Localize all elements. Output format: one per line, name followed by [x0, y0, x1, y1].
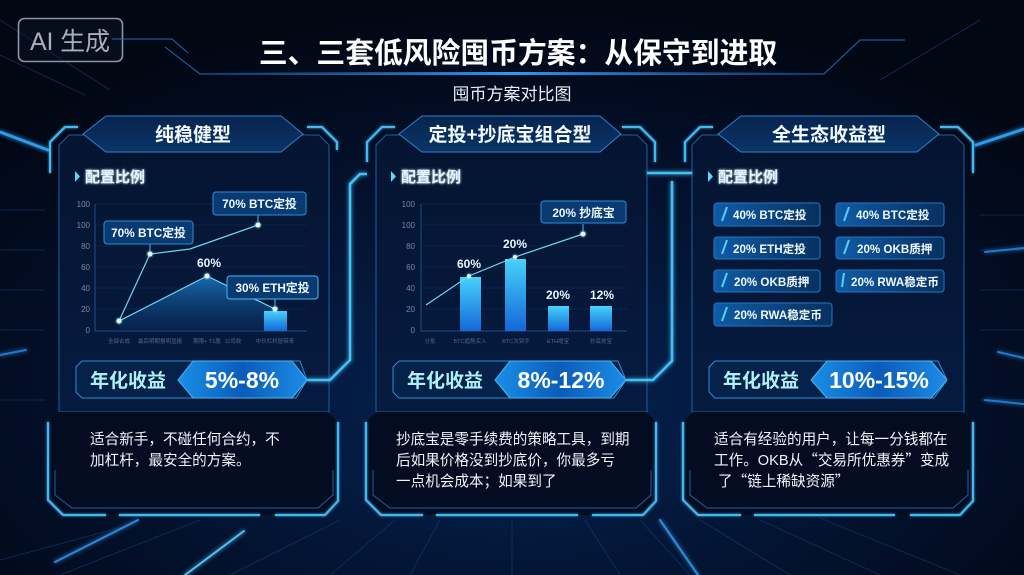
- panel three header: [718, 116, 939, 152]
- chart: allocation line and area: 最后明期报明显报: [138, 337, 182, 345]
- description box two: 后如果价格没到抄底价，你最多亏: [396, 452, 615, 469]
- chart: allocation bars: BTC趋势买入: [453, 337, 487, 345]
- chart: allocation bars: 20: [406, 305, 416, 314]
- description box one: [48, 412, 338, 515]
- description box three: 适合有经验的用户，让每一分钱都在: [714, 431, 948, 448]
- chart: allocation bars: [402, 200, 627, 345]
- chart: allocation bars: 20%: [503, 237, 527, 251]
- AI badge: [18, 18, 122, 62]
- callout: 30% ETH: 30% ETH定投: [235, 281, 310, 295]
- yield bar: 10%-15%: 年化收益: [723, 369, 799, 392]
- panel two header: 定投+抄底宝组合型: [428, 123, 592, 146]
- panel three frame: [685, 127, 973, 412]
- description box two: 抄底宝是零手续费的策略工具，到期: [396, 431, 630, 448]
- tag: 20% RWA left: [714, 303, 832, 326]
- tag: 40% BTC left: 40% BTC定投: [733, 208, 807, 222]
- panel: 全生态收益型: [683, 116, 973, 515]
- callout: 30% ETH: [227, 276, 318, 299]
- chart: allocation bars: 12%: [590, 288, 614, 302]
- connector: panel one to panel two: [307, 174, 367, 380]
- chart: allocation line and area: 100: [77, 221, 91, 230]
- yield bar: 10%-15%: [709, 361, 947, 398]
- chart: allocation line and area: 80: [81, 242, 91, 251]
- tag: 20% RWA left: 20% RWA稳定币: [734, 308, 822, 322]
- AI badge: AI 生成: [30, 28, 110, 56]
- tag: 40% BTC left: [714, 203, 820, 226]
- yield bar: 8%-12%: 8%-12%: [518, 367, 604, 393]
- yield bar: 5%-8%: 5%-8%: [205, 367, 279, 393]
- tag: 20% ETH: 20% ETH定投: [733, 242, 806, 256]
- title glow rule: [200, 72, 824, 75]
- callout: 20% 抄底宝: [541, 201, 626, 223]
- tag: 20% OKB left: [714, 270, 820, 292]
- panel one header: [83, 116, 303, 152]
- description box two: [366, 412, 656, 515]
- yield bar: 5%-8%: [76, 361, 307, 398]
- panel one section heading: 配置比例: [85, 169, 145, 186]
- panel: 定投+抄底宝组合型: [366, 116, 656, 515]
- panel one frame: [50, 127, 337, 412]
- connector: panel two to panel three: [626, 173, 692, 380]
- chart: allocation line and area: 60: [81, 263, 91, 272]
- header ornament lines: [112, 39, 905, 74]
- chart: allocation bars: BTC次到手: [502, 337, 530, 345]
- panel three header: 全生态收益型: [772, 123, 886, 146]
- chart: allocation bars: 40: [406, 284, 416, 293]
- panel: 纯稳健型: [48, 116, 338, 515]
- panel two frame: [367, 127, 655, 412]
- chart: allocation bars: 100: [402, 221, 416, 230]
- tag: 20% OKB right: [836, 237, 944, 259]
- chart: allocation line and area: 期限+ T1股: [193, 337, 221, 345]
- description box two: 一点机会成本；如果到了: [396, 473, 557, 490]
- chart: allocation bars: 抄底技宝: [590, 337, 612, 345]
- chart: allocation line and area: 中长杠杆层带来: [256, 337, 295, 345]
- callout: 70% BTC right: [213, 192, 306, 215]
- callout: 70% BTC left: 70% BTC定投: [111, 226, 186, 240]
- panel one header: 纯稳健型: [155, 123, 231, 146]
- chart: allocation bars: 0: [411, 326, 416, 335]
- callout: 70% BTC right: 70% BTC定投: [222, 197, 297, 211]
- yield bar: 5%-8%: 年化收益: [90, 369, 166, 392]
- description box three: [683, 412, 973, 515]
- chart: allocation line and area: 40: [81, 284, 91, 293]
- chart: allocation bars: 20%: [546, 288, 570, 302]
- chart: allocation line and area: 60%: [197, 256, 221, 270]
- chart: allocation bars: ETH增宝: [547, 337, 569, 345]
- tag: 20% OKB right: 20% OKB质押: [857, 242, 932, 256]
- chart: allocation bars: 60: [406, 263, 416, 272]
- allocation tags: [714, 203, 944, 326]
- description box three: 工作。OKB从“交易所优惠券”变成: [714, 449, 949, 470]
- yield bar: 8%-12%: [393, 361, 626, 398]
- yield bar: 8%-12%: 年化收益: [407, 369, 483, 392]
- panel three section heading: 配置比例: [718, 169, 778, 186]
- title: 三、三套低风险囤币方案：从保守到进取: [259, 38, 777, 70]
- subtitle: 囤币方案对比图: [452, 85, 572, 104]
- chart: allocation bars: 100: [402, 200, 416, 209]
- chart: allocation bars: 80: [406, 242, 416, 251]
- tag: 20% ETH: [714, 237, 820, 259]
- chart: allocation bars: 60%: [457, 257, 481, 271]
- chart: allocation line and area: 0: [86, 326, 91, 335]
- tag: 40% BTC right: 40% BTC定投: [856, 208, 930, 222]
- description box three: 了“链上稀缺资源”: [718, 470, 849, 491]
- chart: allocation bars: 分批: [424, 337, 436, 345]
- callout: 20% 抄底宝: 20% 抄底宝: [552, 206, 615, 220]
- panel two section heading: 配置比例: [401, 169, 461, 186]
- tag: 40% BTC right: [836, 203, 944, 226]
- tag: 20% RWA right: 20% RWA稳定币: [851, 275, 939, 289]
- chart: allocation line and area: 全部合成: [108, 337, 130, 345]
- chart: allocation line and area: 公司收: [225, 337, 242, 345]
- description box one: 加杠杆，最安全的方案。: [90, 451, 251, 469]
- tag: 20% RWA right: [836, 270, 944, 292]
- chart: allocation line and area: 100: [77, 200, 91, 209]
- yield bar: 10%-15%: 10%-15%: [829, 367, 929, 393]
- tag: 20% OKB left: 20% OKB质押: [734, 275, 809, 289]
- callout: 70% BTC left: [104, 221, 193, 244]
- panel two header: [399, 116, 621, 152]
- chart: allocation line and area: 20: [81, 305, 91, 314]
- description box one: 适合新手，不碰任何合约，不: [90, 431, 280, 448]
- chart: allocation line and area: [77, 192, 318, 345]
